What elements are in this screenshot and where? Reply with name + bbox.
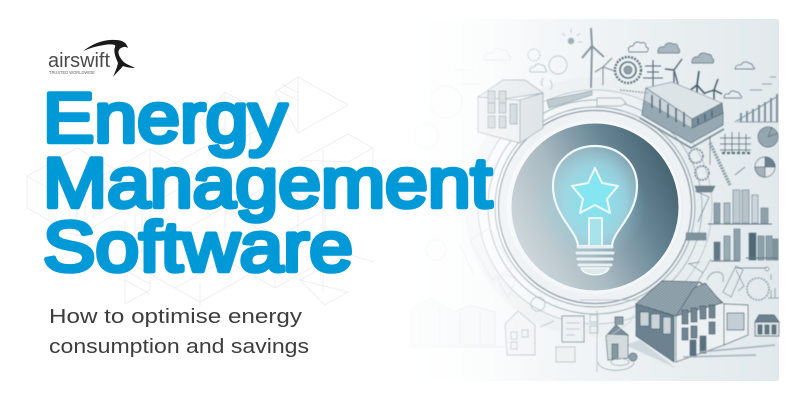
- gears by ring: [689, 143, 730, 185]
- illustration: energy sketch scene: [404, 28, 779, 372]
- background isometric line pattern: [27, 77, 373, 306]
- icon: star: [572, 168, 618, 213]
- faded left sketches: [414, 49, 511, 197]
- title: [43, 78, 492, 286]
- logo: airswift: [48, 40, 135, 77]
- rooftop building on top right: [640, 82, 724, 148]
- grid diagram and pies: [710, 127, 778, 177]
- faded lower sketches: [505, 297, 640, 372]
- logo tagline: TRUSTED WORLDWIDE: [49, 70, 95, 75]
- wind turbines top centre: [582, 28, 722, 112]
- panel: illustration background: [404, 19, 779, 381]
- subtitle: How to optimise energy: [49, 306, 302, 328]
- fade overlay for the left side of the panel: [404, 19, 779, 381]
- title: Management: [43, 143, 492, 222]
- icon: light bulb: [553, 146, 637, 275]
- house bottom right: [625, 281, 779, 368]
- arc band: [547, 90, 648, 108]
- dark gradient disc: [510, 122, 680, 292]
- concentric rings: [471, 83, 719, 331]
- gear: [615, 57, 641, 83]
- line chart right: [735, 77, 778, 122]
- misc sketches right mid: [688, 259, 779, 300]
- house left, faded: [478, 80, 543, 143]
- bird mark: [83, 40, 135, 77]
- title: Energy: [43, 78, 288, 157]
- clouds: [628, 42, 755, 98]
- subtitle: [49, 306, 309, 358]
- glow: [534, 149, 646, 261]
- subtitle: consumption and savings: [49, 336, 309, 358]
- logo wordmark: airswift: [48, 49, 110, 72]
- small tower bottom centre: [598, 314, 637, 370]
- small sketches near top: [528, 29, 582, 90]
- bar charts right: [686, 186, 778, 261]
- central disc with light bulb: [510, 122, 680, 292]
- title: Software: [43, 207, 353, 286]
